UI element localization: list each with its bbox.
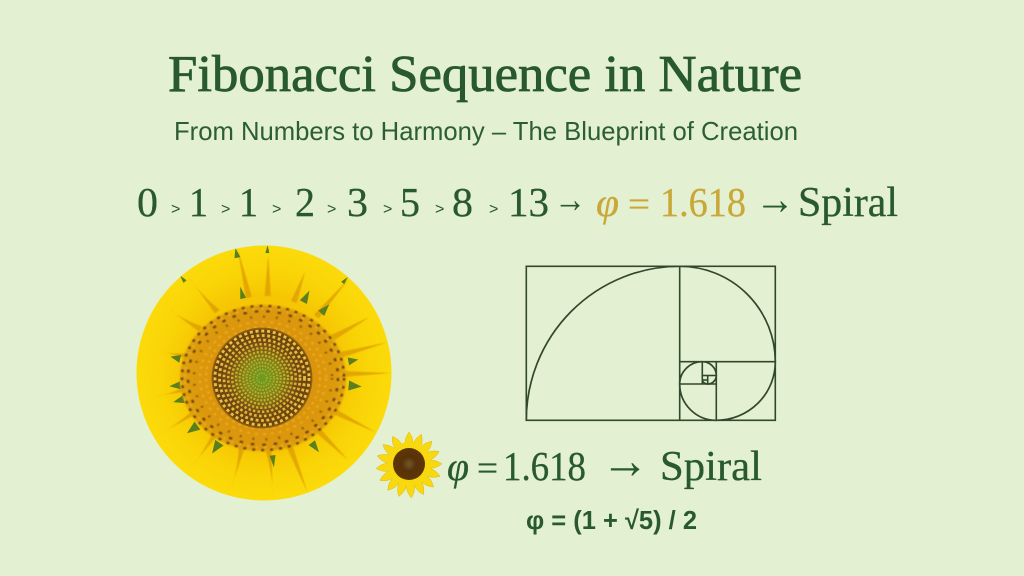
- spiral curve: [526, 266, 775, 420]
- sequence row: 1: [189, 179, 208, 225]
- golden ratio to spiral line: =: [477, 448, 498, 488]
- sequence row: >: [435, 201, 444, 218]
- sequence row: 2: [295, 179, 315, 225]
- inner seed lattice: [212, 328, 312, 428]
- sequence row: →: [554, 179, 586, 221]
- golden ratio to spiral line: Spiral: [660, 444, 762, 490]
- golden ratio value: =: [628, 184, 650, 224]
- green bracts: [169, 245, 362, 468]
- sequence row: 5: [400, 179, 420, 225]
- golden ratio value: [596, 179, 746, 225]
- title: Fibonacci Sequence in Nature: [168, 46, 802, 103]
- subtitle: From Numbers to Harmony – The Blueprint of Creation: [174, 116, 798, 146]
- sequence row: Spiral: [798, 180, 898, 226]
- sequence row: >: [383, 201, 392, 218]
- golden spiral diagram: [526, 266, 775, 420]
- seed disk: [180, 305, 346, 451]
- golden ratio to spiral line: φ: [447, 444, 469, 489]
- formula: φ = (1 + √5) / 2: [526, 505, 697, 535]
- sequence row: 3: [347, 179, 368, 225]
- golden ratio value: 1.618: [660, 179, 746, 225]
- sequence row: 0: [137, 179, 158, 225]
- sequence row: >: [171, 201, 180, 218]
- icon: small sunflower: [376, 432, 442, 498]
- golden ratio to spiral line: [447, 433, 762, 490]
- sequence row: →: [755, 175, 795, 224]
- golden ratio to spiral line: →: [601, 433, 649, 490]
- sequence row: 1: [239, 179, 258, 225]
- golden rectangle grid: [526, 266, 775, 420]
- golden ratio value: φ: [596, 180, 619, 225]
- petal creases: [155, 248, 391, 498]
- icon: large sunflower close-up: [136, 246, 392, 500]
- outer florets: [182, 306, 344, 450]
- sequence row: >: [221, 201, 230, 218]
- sequence row: 8: [452, 179, 473, 225]
- sequence row: [137, 175, 898, 226]
- sequence row: >: [272, 201, 281, 218]
- golden ratio to spiral line: 1.618: [503, 443, 586, 489]
- sequence row: 13: [508, 179, 549, 225]
- sequence row: >: [327, 201, 336, 218]
- sequence row: >: [489, 201, 498, 218]
